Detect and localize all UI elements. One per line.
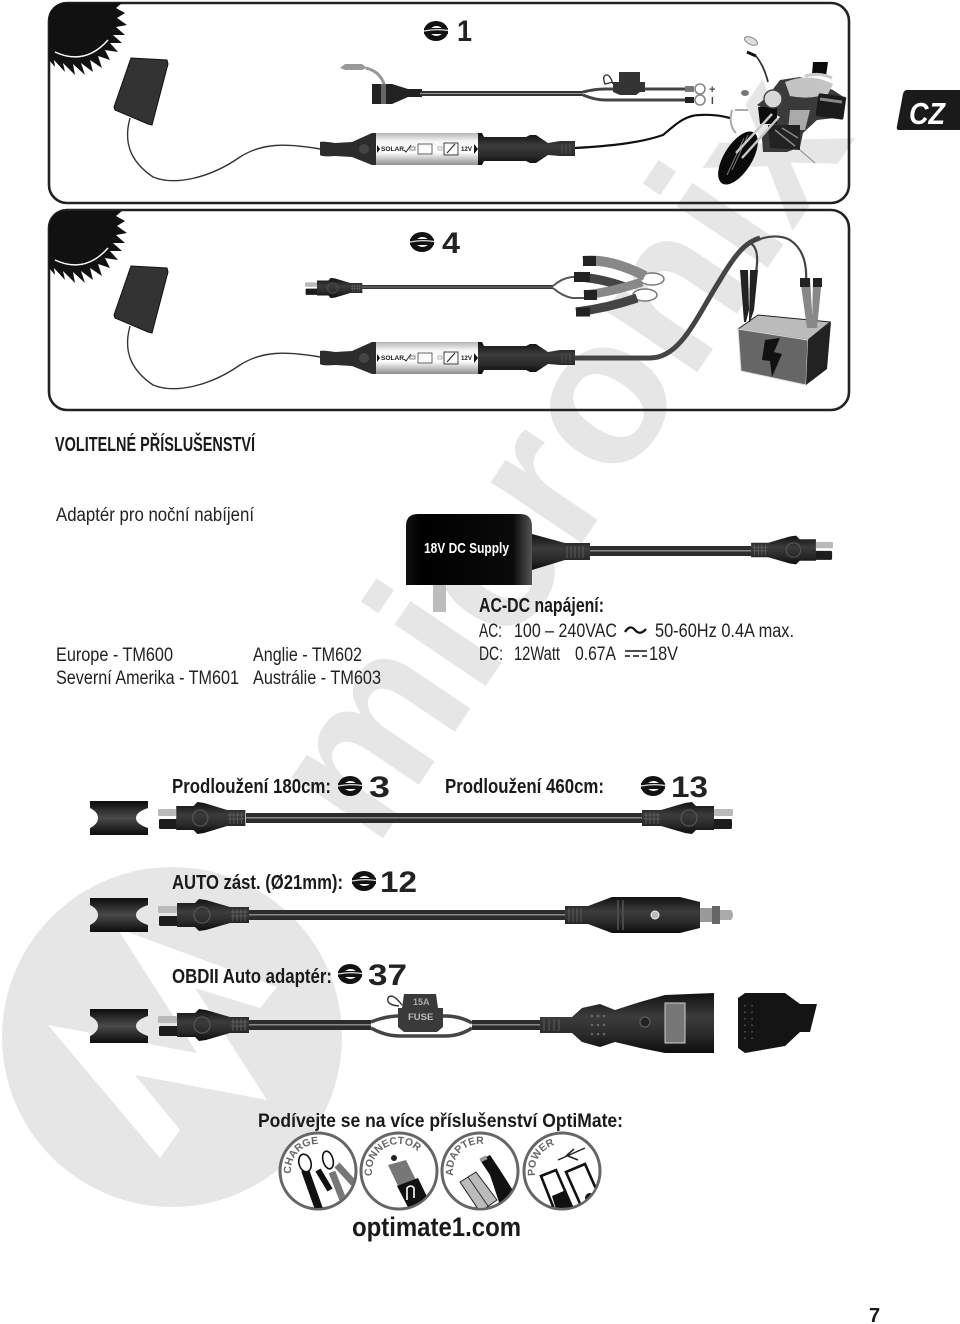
badge: connector xyxy=(360,1132,438,1210)
text: adapter model list: Anglie - TM602 xyxy=(253,645,362,666)
row: auto socket adapter: 12 xyxy=(380,866,417,899)
language tab: CZ xyxy=(909,96,946,131)
row: auto socket adapter: AUTO zást. (Ø21mm): xyxy=(172,872,343,894)
text: adapter model list: Severní Amerika - TM601 xyxy=(56,668,239,689)
text: adapter model list: Europe - TM600 xyxy=(56,645,173,666)
icon: OBD socket xyxy=(738,993,817,1053)
badge: power: POWER xyxy=(528,1139,554,1176)
badge: charge xyxy=(278,1132,358,1210)
row: extension cables 180cm and 460cm: Prodloužení 180cm: xyxy=(172,776,331,798)
connector symbol and number 4 xyxy=(410,227,460,260)
row: OBDII adapter: 37 xyxy=(368,959,407,992)
text: AC-DC specifications xyxy=(479,595,794,665)
text: website: optimate1.com xyxy=(352,1212,521,1242)
panel: battery connection xyxy=(49,210,849,410)
text: adapter model list xyxy=(56,645,381,689)
clip harness cable xyxy=(305,277,585,298)
text: AC-DC specifications: DC: xyxy=(479,644,503,665)
text: AC-DC specifications: 0.67A xyxy=(575,644,616,665)
text: night charging adapter: Adaptér pro noční nabíjení xyxy=(56,505,255,526)
clip on positive terminal xyxy=(800,278,822,328)
panel: motorcycle connection xyxy=(49,3,849,203)
icon: AC-DC power adapter: 18V DC Supply xyxy=(424,540,510,557)
harness cable with fuse and ring terminals xyxy=(420,72,715,107)
heading: optional accessories: VOLITELNÉ PŘÍSLUŠENSTVÍ xyxy=(55,432,255,456)
background watermark logo xyxy=(2,867,342,1207)
row: OBDII adapter xyxy=(90,959,714,1053)
row: extension cables 180cm and 460cm: Prodloužení 460cm: xyxy=(445,776,604,798)
text: AC-DC specifications: 18V xyxy=(649,644,678,665)
badge: adapter xyxy=(440,1132,520,1210)
icon: sun and solar panel xyxy=(49,3,320,181)
connector symbol and number 1 xyxy=(424,15,472,48)
text: AC-DC specifications: AC: xyxy=(479,621,502,642)
row: extension cables 180cm and 460cm xyxy=(90,771,733,835)
badge: charge: CHARGE xyxy=(284,1136,318,1174)
connector symbol and number 4: 4 xyxy=(442,227,460,260)
row: extension cables 180cm and 460cm: 3 xyxy=(369,771,390,804)
harness cable with fuse and ring terminals: + xyxy=(709,84,715,96)
text: AC-DC specifications: 50-60Hz 0.4A max. xyxy=(655,621,794,642)
language tab xyxy=(897,90,960,131)
icon: motorcycle xyxy=(710,35,846,191)
solar controller unit xyxy=(320,342,575,374)
text: AC-DC specifications: 100 – 240VAC xyxy=(514,621,617,642)
icon: battery xyxy=(738,315,831,385)
text: adapter model list: Austrálie - TM603 xyxy=(253,668,381,689)
badge: connector: CONNECTOR xyxy=(364,1136,421,1176)
background watermark word: micronix xyxy=(220,32,893,875)
row: OBDII adapter: 15A xyxy=(413,997,430,1007)
row: extension cables 180cm and 460cm: 13 xyxy=(671,771,708,804)
row: auto socket adapter xyxy=(90,866,733,933)
row: OBDII adapter: OBDII Auto adaptér: xyxy=(172,966,332,988)
text: see more accessories: Podívejte se na více příslušenství OptiMate: xyxy=(258,1110,623,1132)
text: AC-DC specifications: 12Watt xyxy=(514,644,561,665)
icon: sun and solar panel xyxy=(49,211,320,389)
row: OBDII adapter: FUSE xyxy=(408,1012,433,1023)
clip on negative terminal xyxy=(740,270,758,322)
socket with cap xyxy=(340,64,422,104)
icon: AC-DC power adapter xyxy=(406,514,833,612)
badge: power xyxy=(522,1132,602,1210)
battery clips xyxy=(574,261,664,312)
output cable to battery xyxy=(575,236,806,358)
harness cable with fuse and ring terminals: I xyxy=(711,96,714,107)
solar controller unit xyxy=(320,133,575,165)
badge: adapter: ADAPTER xyxy=(446,1136,484,1176)
text: AC-DC specifications: AC-DC napájení: xyxy=(479,595,604,617)
connector symbol and number 1: 1 xyxy=(457,15,472,48)
output cable to motorcycle xyxy=(575,115,730,148)
